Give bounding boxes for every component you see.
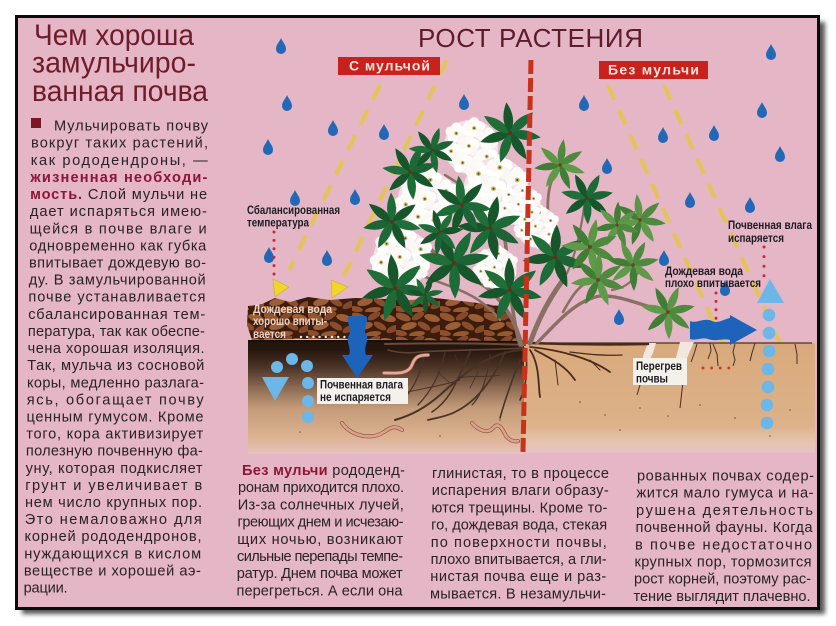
label: rain poorly absorbed: плохо впитывается bbox=[665, 278, 761, 290]
label: rain soaks in well: Дождевая вода bbox=[253, 304, 333, 316]
label: balanced temperature: Сбалансированная bbox=[247, 205, 340, 217]
text block: bottom column 1: перегреться. А если она bbox=[236, 583, 403, 599]
soil: left side bbox=[248, 340, 524, 454]
text block: bottom column 2: испарения влаги образу- bbox=[432, 483, 609, 499]
text block: left column: вокруг таких растений, bbox=[31, 136, 208, 152]
dotted line: rain bbox=[301, 336, 351, 338]
heading bbox=[32, 19, 208, 108]
soil specks bbox=[299, 401, 791, 437]
text block: bottom column 3: тение выглядит плачевно. bbox=[634, 589, 810, 605]
plant branches bbox=[420, 170, 662, 345]
text block: bottom column 1: сильные перепады темпе- bbox=[237, 549, 403, 565]
text block: left column: щейся в почве влаге и bbox=[30, 221, 207, 237]
label: rain soaks in well: вается bbox=[253, 329, 286, 341]
text block: bottom column 1: ронам приходится плохо. bbox=[238, 480, 404, 496]
label: rain poorly absorbed: Дождевая вода bbox=[665, 266, 744, 278]
text block: left column: Так, мульча из сосновой bbox=[27, 358, 204, 374]
heading: замульчиро- bbox=[32, 46, 196, 80]
text block: left column: пература, так как обеспе- bbox=[28, 324, 205, 340]
text block: bottom column 3: почвенной фауны. Когда bbox=[636, 520, 813, 536]
text block: bottom column 3 bbox=[634, 468, 814, 605]
roots: right bbox=[520, 343, 648, 400]
text block: left column: одновременно как губка bbox=[29, 238, 207, 254]
dotted line: overheating bbox=[703, 366, 730, 370]
heading: ванная почва bbox=[32, 75, 208, 108]
sun rays: without mulch bbox=[608, 85, 795, 376]
flower clusters bbox=[370, 117, 559, 290]
text block: bottom column 1: греющих днем и исчезаю- bbox=[238, 515, 404, 531]
heading: Чем хороша bbox=[34, 19, 194, 52]
text block: bottom column 2: плохо впитывается, а гли- bbox=[431, 552, 607, 568]
text block: bottom column 3: рушена деятельность bbox=[636, 503, 813, 519]
bullet square bbox=[31, 118, 41, 128]
text block: left column: сбалансированная тем- bbox=[28, 307, 205, 323]
text block: bottom column 3: в почве недостаточно bbox=[635, 537, 812, 553]
label: soil overheating: Перегрев bbox=[636, 361, 682, 373]
text block: left column: впитывает дождевую во- bbox=[29, 256, 206, 272]
label: rain poorly absorbed bbox=[665, 266, 761, 290]
title: РОСТ РАСТЕНИЯ bbox=[418, 23, 643, 53]
label: soil moisture does not evaporate: не испаряется bbox=[320, 392, 391, 404]
label: without mulch: Без мульчи bbox=[608, 62, 699, 78]
label: soil moisture evaporates: Почвенная влага bbox=[728, 220, 813, 232]
divider line bbox=[523, 60, 531, 452]
label: balanced temperature: температура bbox=[247, 218, 310, 230]
text block: left column: того, кора активизирует bbox=[26, 427, 204, 443]
text block: bottom column 2: мывается. В незамульчи- bbox=[430, 586, 606, 602]
arrowheads: with mulch rays bbox=[273, 279, 348, 298]
text block: bottom column 2: по поверхности почвы, bbox=[431, 535, 607, 551]
evaporation dots bbox=[757, 279, 784, 429]
dotted line: temperature bbox=[272, 232, 276, 274]
text block: bottom column 1: ратур. Днем почва может bbox=[237, 566, 403, 582]
label: soil overheating: почвы bbox=[636, 374, 668, 386]
roots: left bbox=[385, 343, 525, 420]
sun rays: with mulch bbox=[289, 60, 447, 276]
text block: bottom column 3: жится мало гумуса и на- bbox=[636, 486, 814, 502]
text block: left column: чена хорошая изоляция. bbox=[28, 341, 205, 357]
text block: bottom column 2: нистая почва еще и раз- bbox=[430, 569, 606, 585]
text block: bottom column 1: Без мульчи рододенд- bbox=[242, 463, 405, 479]
light green foliage bbox=[525, 130, 706, 351]
text block: left column: полезную почвенную фа- bbox=[26, 444, 203, 460]
text block: left column: нем число крупных пор. bbox=[25, 495, 202, 511]
label: soil overheating bbox=[633, 358, 687, 386]
text block: left column: рации. bbox=[24, 581, 68, 597]
text block: left column: корней рододендронов, bbox=[24, 529, 202, 545]
text block: bottom column 1 bbox=[236, 463, 405, 599]
text block: left column: грунт и увеличивает в bbox=[25, 478, 203, 494]
text block: left column: дает испаряться имею- bbox=[30, 204, 207, 220]
text block: bottom column 2: ются трещины. Кроме то- bbox=[431, 500, 608, 516]
text block: bottom column 1: Из-за солнечных лучей, bbox=[238, 497, 404, 513]
label: with mulch: С мульчой bbox=[349, 58, 430, 74]
arrow: water down bbox=[342, 316, 373, 378]
text block: left column: нуждающихся в кислом bbox=[24, 546, 201, 562]
soil: right side bbox=[523, 343, 815, 453]
dark green foliage bbox=[356, 97, 618, 330]
label: balanced temperature bbox=[247, 205, 340, 230]
text block: bottom column 2: глинистая, то в процессе bbox=[432, 466, 609, 482]
text block: left column: жизненная необходи- bbox=[29, 170, 208, 186]
label: soil moisture evaporates: испаряется bbox=[728, 233, 784, 245]
text block: left column: коры, медленно разлага- bbox=[27, 375, 204, 391]
ground surface and cracks: without mulch bbox=[548, 342, 812, 408]
raindrops bbox=[263, 38, 785, 325]
text block: left column: ду. В замульчированной bbox=[29, 273, 206, 289]
text block: left column: уну, которая подкисляет bbox=[26, 461, 203, 477]
text block: bottom column 1: щих ночью, возникают bbox=[237, 532, 404, 548]
text block: left column: ценным гумусом. Кроме bbox=[26, 410, 204, 426]
text block: bottom column 3: рованных почвах содер- bbox=[637, 468, 814, 484]
label: soil moisture does not evaporate bbox=[317, 378, 408, 404]
text block: left column: веществе и хорошей аэ- bbox=[24, 564, 201, 580]
text block: bottom column 2: го, дождевая вода, стекая bbox=[431, 518, 607, 534]
text block: left column: как рододендроны, — bbox=[31, 153, 208, 169]
mulch layer bbox=[247, 297, 522, 341]
label: soil moisture evaporates bbox=[728, 220, 813, 245]
text block: left column: ясь, обогащает почву bbox=[27, 392, 204, 408]
label: rain soaks in well: хорошо впиты- bbox=[253, 316, 327, 328]
dotted line: rain poorly absorbed bbox=[714, 293, 718, 319]
text block: left column: мость. Слой мульчи не bbox=[30, 187, 207, 203]
text block: left column: Мульчировать почву bbox=[54, 119, 209, 135]
dotted line: evaporation bbox=[762, 247, 766, 277]
text block: left column: почве устанавливается bbox=[28, 290, 205, 306]
label: rain soaks in well bbox=[253, 304, 333, 341]
label: soil moisture does not evaporate: Почвенная влага bbox=[320, 380, 404, 392]
soil moisture dots: with mulch bbox=[262, 353, 314, 423]
arrowheads: without mulch rays bbox=[725, 371, 803, 390]
text block: left column: Это немаловажно для bbox=[25, 512, 202, 528]
text block: bottom column 3: рост корней, поэтому рас- bbox=[634, 572, 811, 588]
text block: bottom column 2 bbox=[430, 466, 609, 602]
worms bbox=[342, 355, 518, 441]
text block: left column bbox=[24, 119, 209, 597]
text block: bottom column 3: крупных пор, тормозится bbox=[634, 554, 812, 570]
arrow: runoff bbox=[690, 315, 757, 345]
